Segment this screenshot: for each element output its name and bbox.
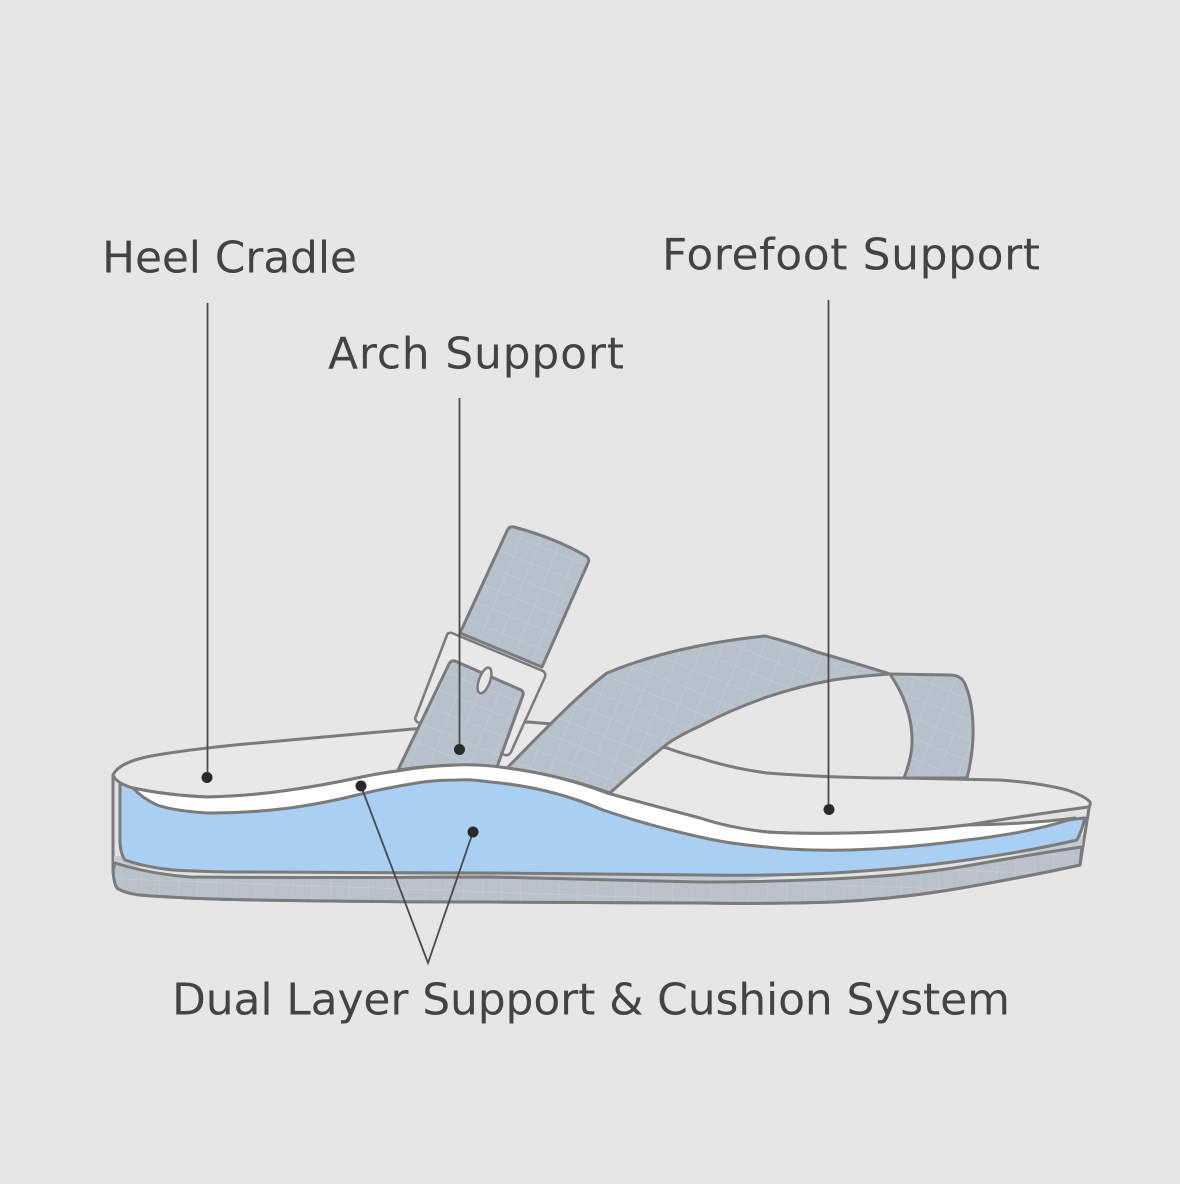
white support layer: [133, 765, 1075, 850]
buckle top strap: [460, 527, 589, 667]
main toe strap: [507, 636, 890, 793]
footbed top: [113, 722, 1090, 833]
label: Forefoot Support: Forefoot Support: [662, 230, 1040, 280]
sole outer shell: [113, 775, 1090, 903]
leader: Forefoot Support: [824, 300, 834, 815]
sole bottom band: [113, 847, 1082, 903]
leader: Heel Cradle: [202, 303, 212, 783]
buckle frame: [415, 633, 545, 755]
label: Dual Layer Support & Cushion System: Dual Layer Support & Cushion System: [172, 974, 1010, 1026]
label: Arch Support: Arch Support: [328, 328, 624, 380]
sandal illustration: [113, 527, 1090, 903]
blue cushion layer: [120, 765, 1085, 875]
arch strap lower: [398, 661, 523, 770]
sole middle sliver: [114, 835, 1083, 884]
leader: Dual Layer: [356, 780, 478, 963]
far toe strap: [890, 674, 973, 778]
buckle pin: [475, 666, 494, 695]
label: Heel Cradle: Heel Cradle: [102, 232, 357, 284]
leader: Arch Support: [454, 398, 465, 755]
